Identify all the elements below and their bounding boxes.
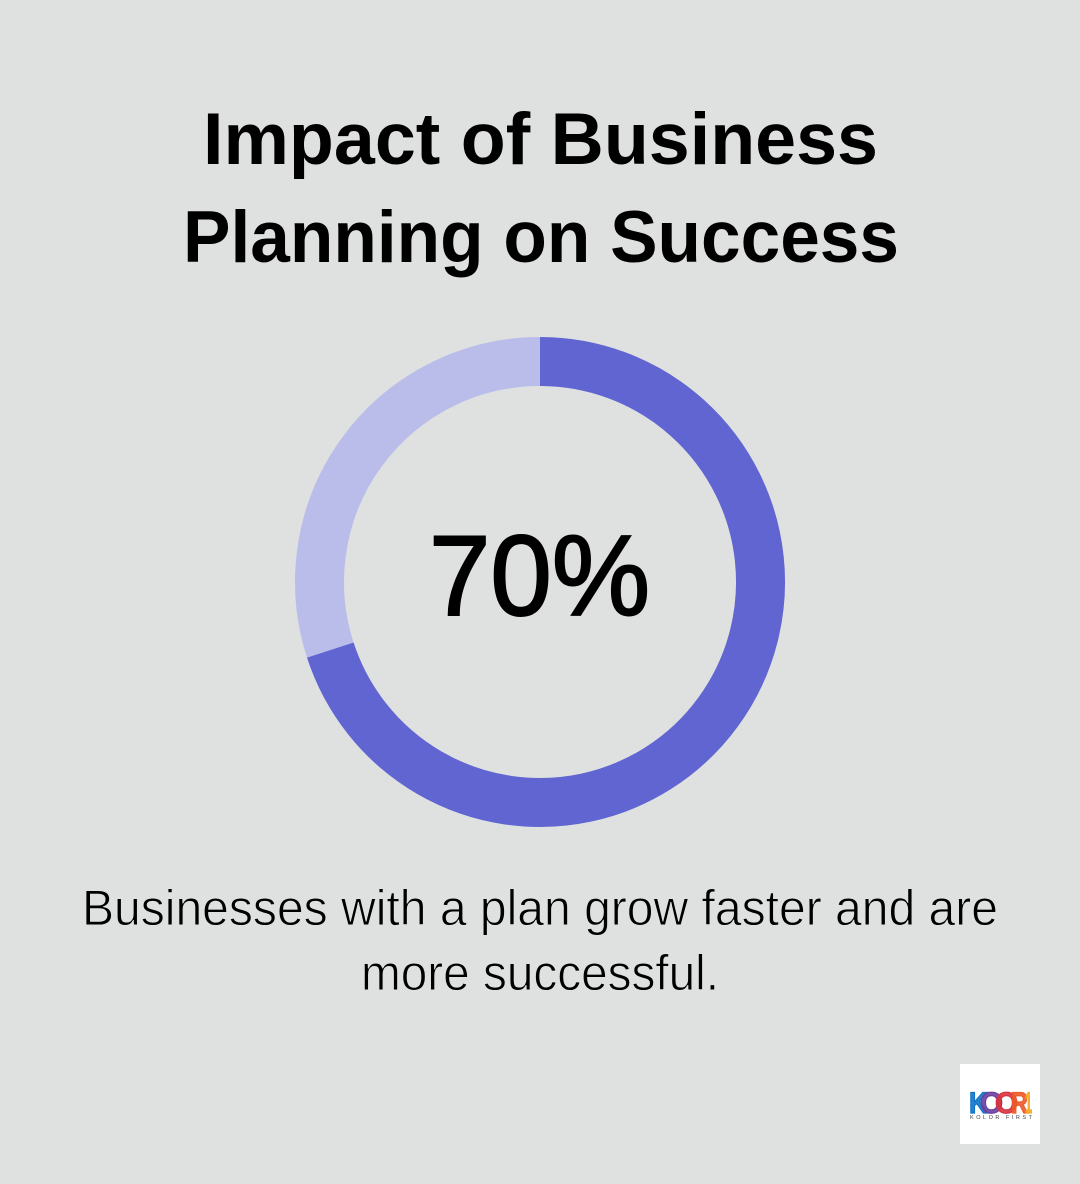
logo wordmark xyxy=(969,1087,1032,1120)
logo: Koor1 Kolor First xyxy=(960,1064,1040,1144)
logo wordmark: O xyxy=(980,1087,1003,1120)
logo wordmark: R xyxy=(1011,1087,1028,1120)
remaining segment xyxy=(320,362,540,650)
central statistic: 70% xyxy=(429,513,650,640)
description xyxy=(82,880,998,1001)
title xyxy=(183,99,899,278)
logo tagline: KOLOR FIRST xyxy=(970,1115,1033,1121)
logo wordmark: O xyxy=(995,1087,1018,1120)
logo: Koor1 Kolor First: 1 xyxy=(1025,1087,1032,1120)
description: Businesses with a plan grow faster and are xyxy=(82,880,998,936)
title: Impact of Business xyxy=(203,99,878,180)
description: more successful. xyxy=(361,945,719,1001)
donut chart: 70% xyxy=(320,362,761,802)
70% segment xyxy=(330,362,761,802)
title: Planning on Success xyxy=(183,197,899,278)
logo wordmark: K xyxy=(969,1087,988,1120)
